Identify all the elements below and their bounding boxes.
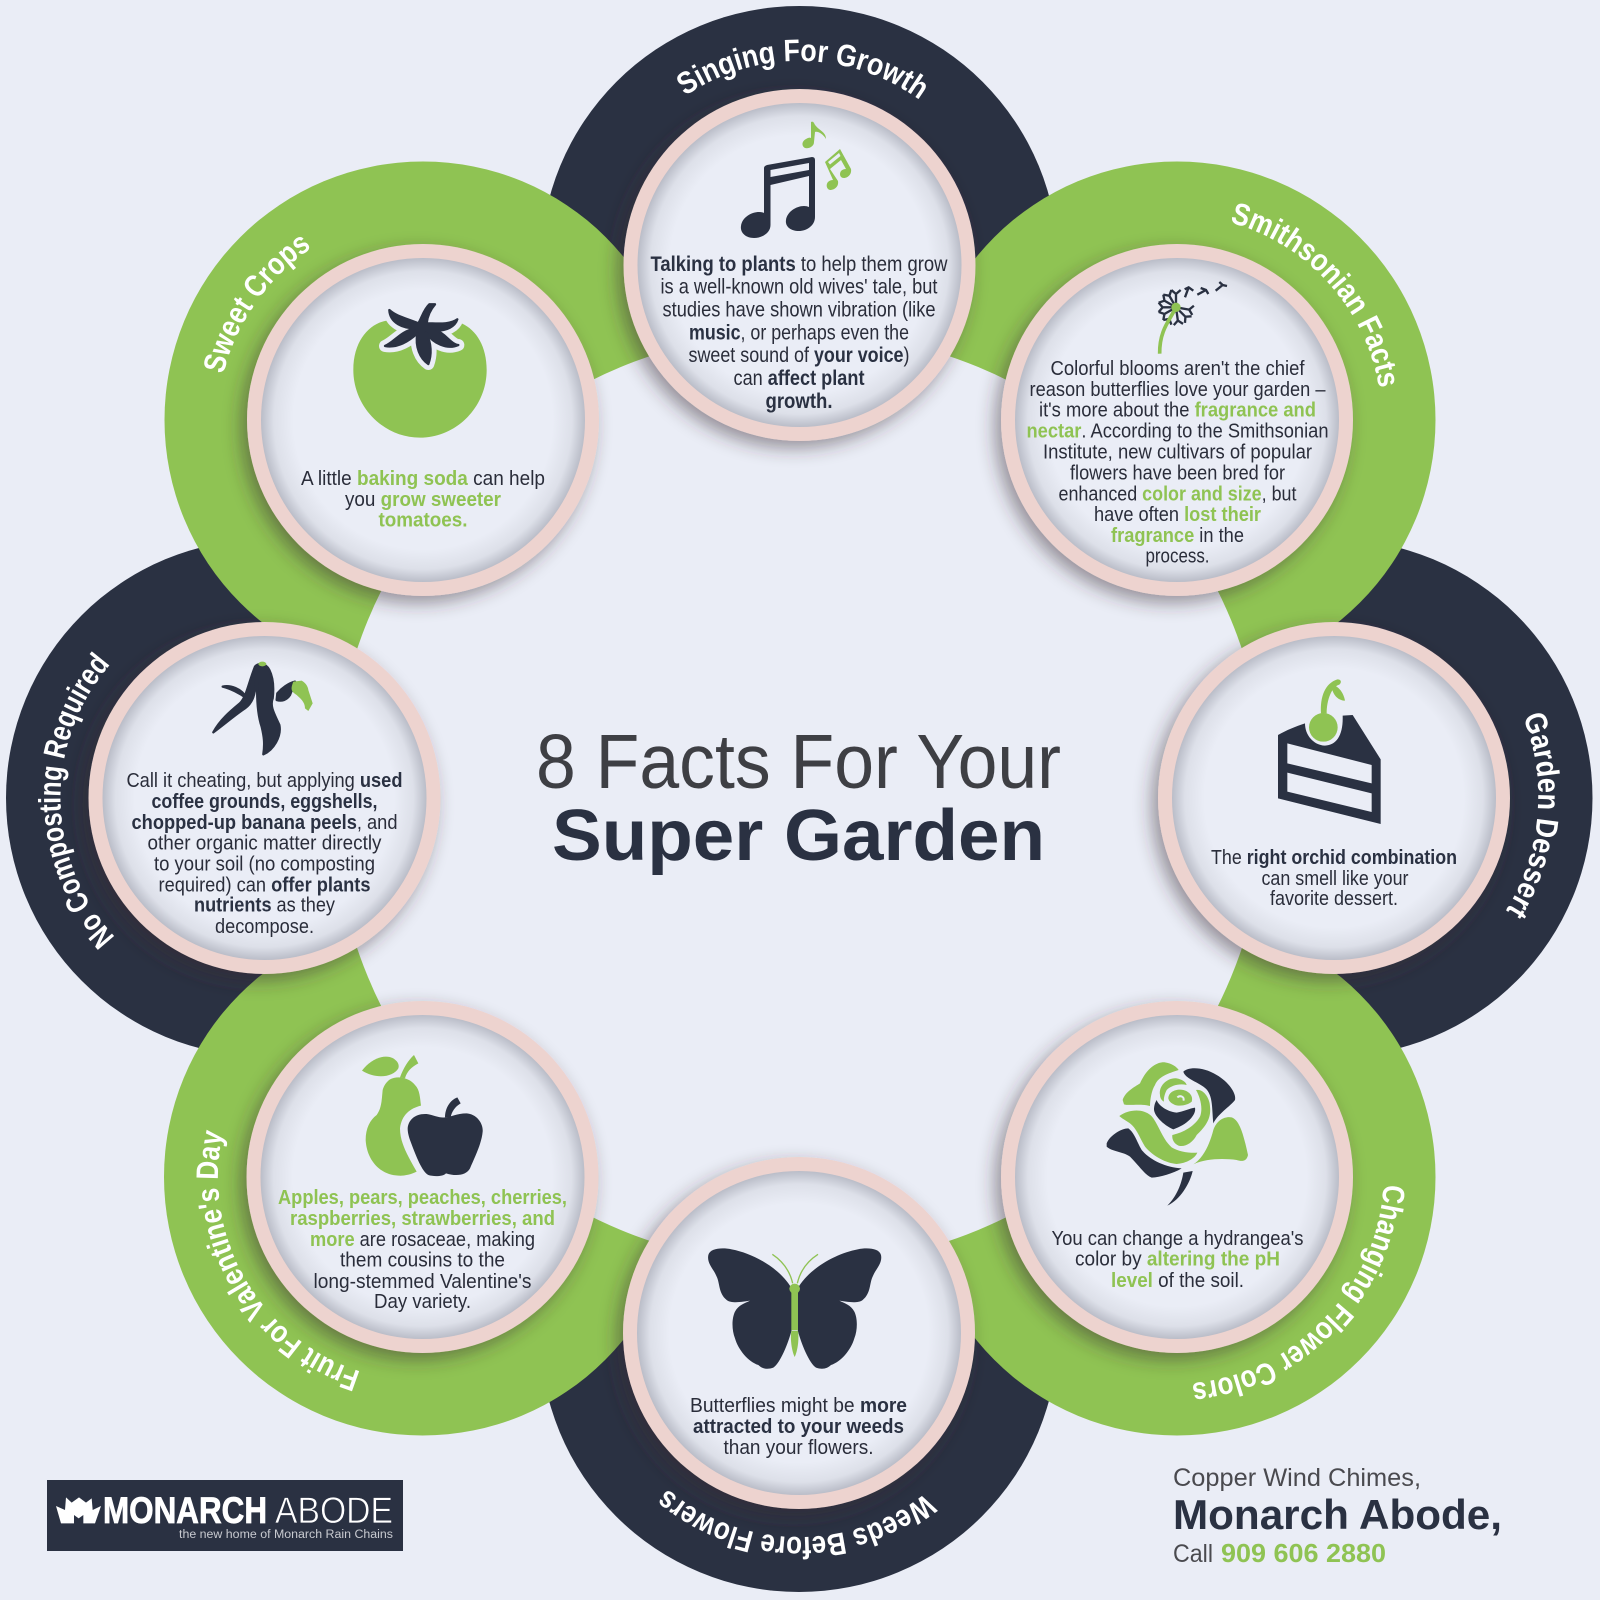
icon: rose [1107, 1062, 1248, 1206]
icon: butterfly [708, 1248, 881, 1369]
text: composting: required) can offer plants [158, 874, 370, 896]
icon: cake slice [1278, 679, 1381, 824]
text: right orchid combination [1211, 847, 1457, 910]
text: colorful blooms: have often lost their [1094, 504, 1261, 526]
contact block: 909 606 2880 [1221, 1538, 1386, 1568]
logo wordmark: MONARCH [103, 1490, 267, 1531]
panel: Smithsonian Facts [982, 204, 1396, 616]
icon: pear and apple [362, 1055, 483, 1176]
text: hydrangea: You can change a hydrangea's [1052, 1228, 1304, 1250]
icon: music notes [741, 122, 851, 238]
text: rosaceae: more are rosaceae, making [310, 1229, 535, 1251]
icon: tomato [353, 304, 487, 438]
text: composting [126, 770, 402, 938]
heading: Changing Flower Colors: Changing Flower Colors [1193, 1186, 1404, 1400]
text: butterflies: attracted to your weeds [693, 1416, 904, 1438]
text: baking soda: A little baking soda can help [301, 468, 545, 490]
panel: Sweet Crops [204, 237, 606, 616]
panel: Garden Dessert [1140, 618, 1560, 992]
text: colorful blooms: flowers have been bred for [1070, 462, 1285, 484]
text: rosaceae [278, 1187, 567, 1313]
text: butterflies: than your flowers. [724, 1437, 874, 1459]
green outer discs [164, 162, 1436, 1436]
logo: Monarch Abode: ABODE [275, 1490, 393, 1531]
text: composting: Call it cheating, but applying used [126, 770, 402, 792]
logo: Monarch Abode: the new home of Monarch Rain Chains [179, 1529, 393, 1541]
contact block: Call [1173, 1540, 1213, 1568]
text: baking soda: tomatoes. [378, 510, 468, 532]
text: talking to plants [650, 252, 948, 413]
heading: Weeds Before Flowers: Weeds Before Flowers [660, 1491, 938, 1560]
text: butterflies [690, 1395, 907, 1459]
heading: Sweet Crops: Sweet Crops [204, 237, 310, 372]
text: right orchid combination: The right orchid combination [1211, 847, 1457, 869]
heading: No Composting Required: No Composting Required [38, 651, 114, 950]
icon: dandelion [1159, 282, 1227, 354]
central background disc [332, 332, 1266, 1266]
panel: Fruit For Valentine's Day [196, 996, 605, 1392]
heading: Fruit For Valentine's Day: Fruit For Valentine's Day [196, 1130, 360, 1392]
text: colorful blooms: nectar. According to the Smithsonian [1026, 421, 1328, 443]
title: 8 Facts For Your [536, 719, 1061, 805]
text: rosaceae: them cousins to the [340, 1250, 505, 1272]
text: colorful blooms: Colorful blooms aren't the chief [1050, 358, 1305, 380]
text: baking soda: you grow sweeter [345, 489, 501, 511]
text: hydrangea: color by altering the pH [1075, 1248, 1280, 1270]
text: colorful blooms [1026, 358, 1328, 568]
icon: crown [56, 1497, 101, 1523]
text: hydrangea [1052, 1228, 1304, 1292]
text: talking to plants: is a well-known old wives' tale, but [660, 275, 938, 299]
text: talking to plants: music, or perhaps even the [689, 320, 909, 344]
panel: No Composting Required [38, 618, 447, 992]
text: composting: other organic matter directly [148, 832, 382, 854]
text: talking to plants: growth. [766, 389, 832, 413]
logo: Monarch Abode [47, 1480, 403, 1551]
contact block [1173, 1464, 1502, 1568]
contact block: Copper Wind Chimes, [1173, 1464, 1421, 1492]
text: composting: nutrients as they [194, 894, 335, 916]
text: colorful blooms: process. [1146, 546, 1210, 568]
title [536, 719, 1061, 876]
text: colorful blooms: it's more about the fragrance and [1039, 400, 1316, 422]
heading: Garden Dessert: Garden Dessert [1506, 713, 1560, 919]
text: baking soda [301, 468, 545, 532]
text: colorful blooms: Institute, new cultivars of popular [1043, 442, 1312, 464]
text: butterflies: Butterflies might be more [690, 1395, 907, 1417]
text: composting: to your soil (no composting [154, 854, 375, 876]
text: rosaceae: long-stemmed Valentine's [314, 1271, 532, 1293]
text: colorful blooms: enhanced color and size, but [1058, 484, 1297, 506]
text: talking to plants: can affect plant [734, 366, 864, 390]
text: rosaceae: raspberries, strawberries, and [290, 1208, 555, 1230]
text: right orchid combination: can smell like your [1262, 868, 1409, 890]
text: rosaceae: Apples, pears, peaches, cherries, [278, 1187, 567, 1209]
contact block: Monarch Abode, [1173, 1491, 1502, 1538]
panel: Changing Flower Colors [982, 996, 1404, 1400]
heading: Smithsonian Facts: Smithsonian Facts [1232, 204, 1396, 386]
text: composting: coffee grounds, eggshells, [152, 791, 378, 813]
text: talking to plants: sweet sound of your voice) [688, 343, 910, 367]
text: colorful blooms: fragrance in the [1111, 525, 1244, 547]
text: hydrangea: level of the soil. [1111, 1270, 1244, 1292]
text: right orchid combination: favorite dessert. [1270, 888, 1398, 910]
text: talking to plants: studies have shown vibration (like [662, 297, 936, 321]
text: composting: decompose. [215, 916, 314, 938]
text: composting: chopped-up banana peels, and [132, 812, 397, 834]
text: colorful blooms: reason butterflies love your garden – [1030, 379, 1326, 401]
panel: Weeds Before Flowers [606, 1152, 980, 1560]
title: Super Garden [552, 796, 1045, 876]
text: talking to plants: Talking to plants to help them grow [650, 252, 948, 276]
heading: Singing For Growth: Singing For Growth [677, 40, 926, 99]
text: rosaceae: Day variety. [374, 1291, 471, 1313]
icon: banana peel [213, 662, 313, 754]
panel: Singing For Growth [606, 40, 980, 460]
